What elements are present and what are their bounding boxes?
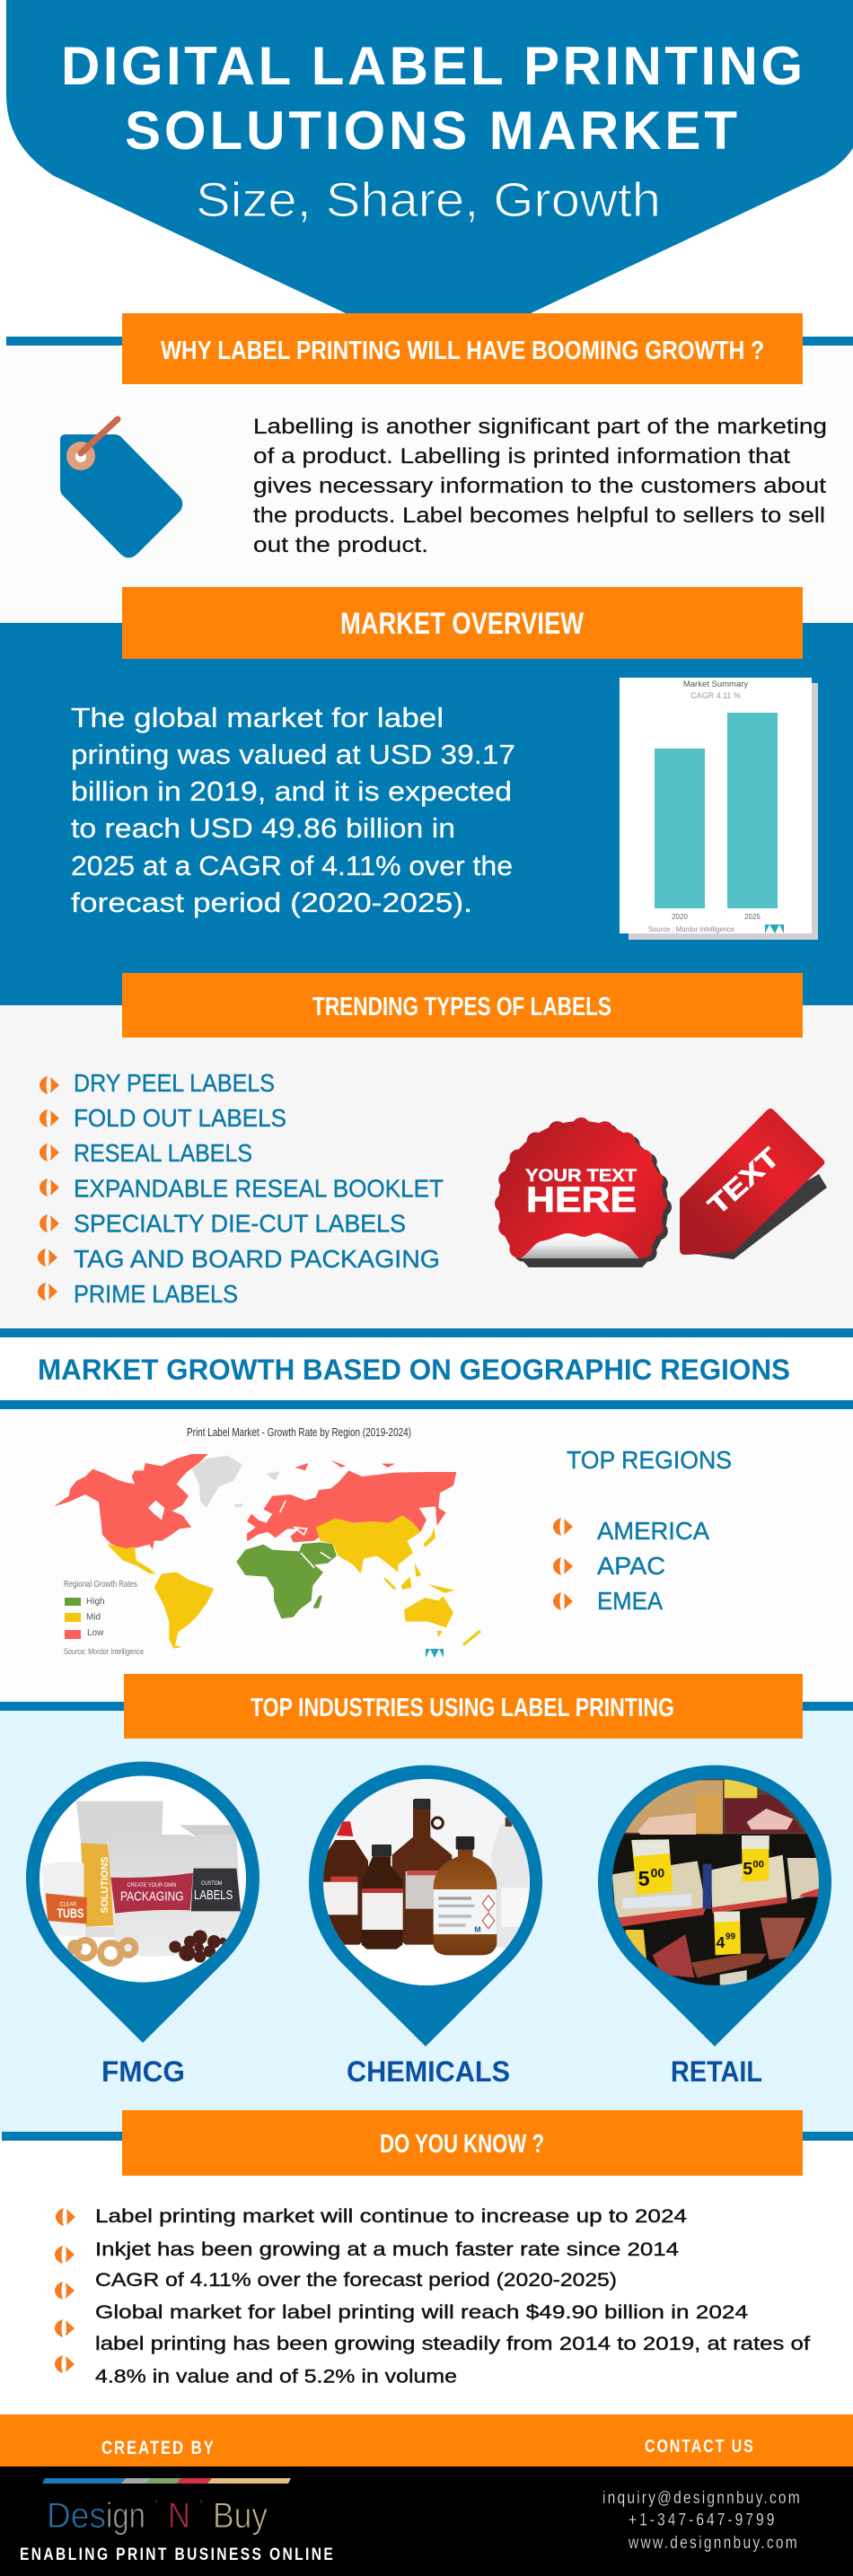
header banner — [6, 0, 853, 313]
label: fmcg: FMCG — [101, 2055, 185, 2088]
heading: do you know — [122, 2110, 803, 2176]
heading: trending types of labels — [122, 973, 803, 1038]
logo: design n buy wordmark: Buy — [213, 2496, 268, 2536]
panel: geographic map background — [0, 1409, 853, 1702]
photo: packaging pouches: SOLUTIONS — [100, 1856, 110, 1914]
map: asia and oceania — [316, 1515, 481, 1646]
fact: cagr — [55, 2270, 617, 2300]
photo: packaging pouches: CREATE YOUR OWN — [127, 1882, 176, 1888]
list item: apac — [553, 1552, 665, 1580]
heading: top industries — [124, 1674, 803, 1739]
heading: do you know: DO YOU KNOW ? — [380, 2130, 544, 2159]
text: labelling description: out the product. — [253, 533, 428, 557]
tagline: ENABLING PRINT BUSINESS ONLINE — [20, 2544, 333, 2563]
logo: design n buy wordmark: ign — [106, 2496, 145, 2536]
photo: supermarket shelf: 4 — [717, 1933, 725, 1951]
list: trending label types — [38, 1069, 444, 1308]
photo: chemical bottles: M — [474, 1925, 481, 1934]
logo: design n buy wordmark: ' — [199, 2495, 203, 2518]
heading: market overview — [122, 587, 803, 659]
logo: mordor mark — [765, 924, 784, 933]
blue rule behind do you know heading — [2, 2132, 853, 2141]
list item: emea — [553, 1587, 663, 1615]
chart: market summary bar chart: 2025 — [744, 913, 761, 921]
legend: regional growth rates — [64, 1579, 144, 1656]
legend: regional growth rates: Regional Growth Rates — [64, 1579, 137, 1590]
fact: steady growth rates: 4.8% in value and of 5.2% in volume — [95, 2366, 457, 2388]
list item: reseal labels: RESEAL LABELS — [74, 1139, 252, 1167]
photo: packaging pouches: TUBS — [57, 1907, 84, 1922]
photo: supermarket shelf: 99 — [725, 1932, 736, 1942]
panel: market overview background — [0, 623, 853, 1005]
logo: colour bar — [42, 2478, 291, 2484]
fact: steady growth rates: label printing has been growing steadily from 2014 to 2019, at rates of — [95, 2334, 810, 2354]
icon: scalloped red sticker — [498, 1121, 668, 1290]
logo: design n buy wordmark: Des — [47, 2496, 106, 2536]
text: market overview: 2025 at a CAGR of 4.11% over the — [71, 850, 513, 881]
footer: black panel — [0, 2466, 853, 2576]
chart: market summary bar chart: Market Summary — [683, 679, 748, 689]
list item: prime labels: PRIME LABELS — [74, 1280, 238, 1308]
photo: supermarket shelf: 00 — [752, 1860, 764, 1871]
fact: global market value — [55, 2302, 748, 2337]
fact: inkjet growth: Inkjet has been growing at a much faster rate since 2014 — [95, 2239, 679, 2260]
text: market overview: forecast period (2020-2025). — [71, 887, 472, 918]
map: latin america — [107, 1544, 214, 1649]
photo: supermarket shelf: 5 — [743, 1860, 752, 1879]
contact details: +1-347-647-9799 — [629, 2510, 774, 2529]
text: labelling description: the products. Label becomes helpful to sellers to sell — [253, 504, 825, 528]
chart: market summary bar chart — [620, 678, 818, 940]
icon: scalloped red sticker: YOUR TEXT — [525, 1167, 637, 1186]
chart: world map of growth rates — [54, 1426, 481, 1658]
photo: packaging pouches: LABELS — [194, 1888, 233, 1903]
text: labelling description — [253, 415, 827, 557]
logo: design n buy wordmark — [47, 2495, 268, 2536]
list item: expandable reseal booklet: EXPANDABLE RESEAL BOOKLET — [74, 1174, 444, 1203]
photo: supermarket shelf — [611, 1777, 820, 1985]
icon: price tag — [60, 419, 182, 558]
text: market overview: The global market for label — [71, 702, 444, 733]
pin: fmcg — [26, 1762, 259, 2043]
heading: top regions: TOP REGIONS — [567, 1446, 732, 1474]
text: market overview: to reach USD 49.86 billion in — [71, 812, 455, 844]
legend: regional growth rates: Source: Mordor Intelligence — [64, 1647, 144, 1656]
heading: top industries: TOP INDUSTRIES USING LABEL PRINTING — [251, 1694, 674, 1722]
logo: design n buy wordmark: ' — [154, 2495, 158, 2518]
list item: emea: EMEA — [597, 1587, 663, 1615]
map: africa and middle east — [236, 1542, 337, 1618]
legend: regional growth rates: Mid — [86, 1612, 101, 1623]
bar: 2020 — [655, 749, 705, 908]
panel: trending types background — [0, 1005, 853, 1328]
title — [61, 36, 803, 161]
legend: regional growth rates: Low — [87, 1628, 104, 1638]
contact details: www.designnbuy.com — [628, 2533, 797, 2552]
list: top regions — [553, 1517, 709, 1615]
pin: retail — [598, 1766, 831, 2046]
text: labelling description: Labelling is another significant part of the marketing — [253, 415, 827, 439]
photo: packaging pouches: CLEAR — [60, 1901, 76, 1907]
heading: market overview: MARKET OVERVIEW — [340, 607, 585, 641]
map: north america — [54, 1454, 208, 1550]
heading: why label printing — [122, 313, 803, 384]
photo: supermarket shelf: 5 — [638, 1867, 650, 1890]
blue rule under regions heading — [0, 1400, 853, 1409]
text: market overview: billion in 2019, and it is expected — [71, 775, 512, 807]
logo: design n buy wordmark: N — [168, 2496, 190, 2536]
fact: steady growth rates — [55, 2334, 810, 2388]
list: do you know facts — [55, 2206, 810, 2388]
text: labelling description: of a product. Labelling is printed information that — [253, 444, 790, 469]
fact: global market value: Global market for label printing will reach $49.90 billion in 2024 — [95, 2302, 748, 2323]
chart: market summary bar chart: CAGR 4.11 % — [690, 691, 741, 700]
list item: tag and board packaging: TAG AND BOARD PACKAGING — [74, 1245, 440, 1273]
chart: market summary bar chart: 2020 — [672, 913, 688, 921]
icon: red arrow tag: TEXT — [703, 1143, 786, 1221]
map: europe and russia — [247, 1460, 456, 1542]
chart: world map of growth rates: Print Label Market - Growth Rate by Region (2019-2024) — [187, 1426, 411, 1439]
blue rule behind industries heading — [0, 1702, 853, 1711]
heading: market growth by region: MARKET GROWTH BASED ON GEOGRAPHIC REGIONS — [38, 1354, 790, 1386]
footer: orange strip — [0, 2414, 853, 2466]
photo: packaging pouches: PACKAGING — [120, 1889, 184, 1904]
fact: cagr: CAGR of 4.11% over the forecast period (2020-2025) — [95, 2270, 617, 2291]
text: market overview — [71, 702, 515, 918]
legend: regional growth rates: High — [86, 1597, 105, 1607]
list item: specialty die-cut labels: SPECIALTY DIE-CUT LABELS — [74, 1210, 406, 1237]
text: labelling description: gives necessary information to the customers about — [253, 474, 826, 498]
pin: chemicals — [309, 1766, 542, 2046]
heading: trending types of labels: TRENDING TYPES OF LABELS — [312, 993, 611, 1021]
list item: america: AMERICA — [597, 1517, 709, 1545]
contact details: inquiry@designnbuy.com — [602, 2488, 800, 2507]
text: market overview: printing was valued at USD 39.17 — [71, 739, 515, 770]
blue rule behind why heading — [6, 337, 853, 346]
panel: why label printing background — [0, 346, 853, 624]
contact details — [602, 2488, 800, 2552]
bar: 2025 — [727, 713, 778, 908]
label: retail: RETAIL — [671, 2055, 762, 2088]
photo: packaging pouches — [42, 1801, 241, 1963]
icon: scalloped red sticker: HERE — [526, 1180, 637, 1220]
label: chemicals: CHEMICALS — [347, 2055, 510, 2088]
photo: chemical bottles — [317, 1799, 532, 1990]
logo: map mordor mark — [426, 1649, 444, 1658]
icon: red arrow tag — [680, 1108, 827, 1259]
map: greenland — [191, 1456, 280, 1508]
photo: supermarket shelf: 00 — [651, 1866, 664, 1880]
subtitle: Size, Share, Growth — [196, 173, 661, 227]
list item: apac: APAC — [597, 1552, 665, 1580]
fact: inkjet growth — [55, 2239, 679, 2264]
photo: packaging pouches: CUSTOM — [201, 1880, 222, 1887]
list item: dry peel labels: DRY PEEL LABELS — [74, 1069, 275, 1097]
title: DIGITAL LABEL PRINTING — [61, 36, 803, 96]
footer: orange strip: CONTACT US — [645, 2436, 753, 2456]
fact: market increase: Label printing market will continue to increase up to 2024 — [95, 2206, 687, 2227]
list item: fold out labels: FOLD OUT LABELS — [74, 1104, 286, 1132]
chart: market summary bar chart: Source : Mordor Intelligence — [648, 925, 735, 933]
title: SOLUTIONS MARKET — [125, 101, 737, 161]
panel: top industries background — [0, 1711, 853, 2133]
footer: orange strip: CREATED BY — [101, 2438, 214, 2459]
blue rule under trending section — [0, 1328, 853, 1337]
